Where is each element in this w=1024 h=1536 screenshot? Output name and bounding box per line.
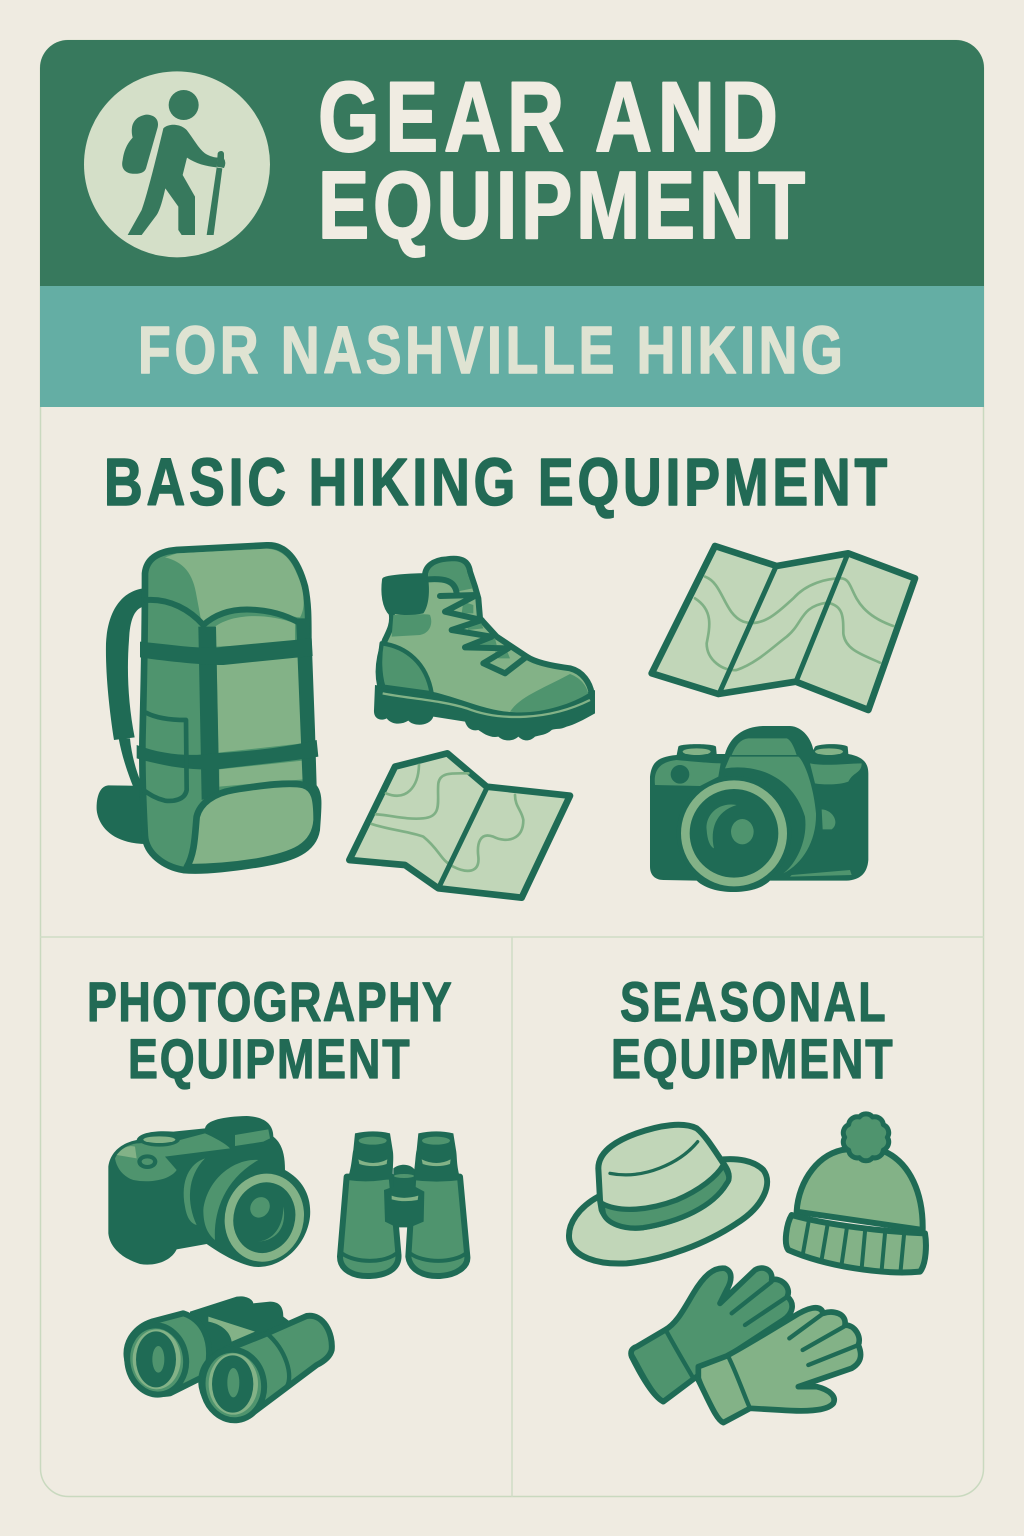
icon: camera three-quarter view <box>108 1116 310 1267</box>
icon: folded map upper <box>652 546 915 710</box>
panel: seasonal equipment <box>569 970 926 1423</box>
icon: folded map lower <box>349 753 570 898</box>
heading: seasonal equipment: SEASONAL <box>620 970 886 1033</box>
icon: hiker badge <box>84 71 270 257</box>
panel: basic hiking equipment <box>97 444 915 898</box>
title: EQUIPMENT <box>318 152 805 259</box>
icon: pair of gloves <box>631 1268 861 1423</box>
panel: photography equipment <box>87 970 467 1424</box>
icon: backpack <box>97 545 318 871</box>
heading: photography equipment: EQUIPMENT <box>128 1027 410 1090</box>
heading: seasonal equipment: EQUIPMENT <box>611 1027 893 1090</box>
title <box>318 62 805 259</box>
icon: binoculars angled <box>123 1296 332 1424</box>
heading: photography equipment <box>87 970 452 1090</box>
icon: camera front view <box>650 726 868 892</box>
heading: photography equipment: PHOTOGRAPHY <box>87 970 452 1033</box>
subtitle band: FOR NASHVILLE HIKING <box>138 312 843 387</box>
icon: hiking boot <box>374 559 595 740</box>
icon: pom-pom beanie <box>786 1114 926 1272</box>
header banner <box>40 40 984 286</box>
heading: seasonal equipment <box>611 970 893 1090</box>
title: GEAR AND <box>318 62 778 172</box>
icon: sun hat <box>569 1125 767 1264</box>
subtitle band <box>40 286 984 407</box>
icon: binoculars upright <box>340 1131 467 1276</box>
heading: basic hiking equipment: BASIC HIKING EQUIPMENT <box>104 444 887 519</box>
